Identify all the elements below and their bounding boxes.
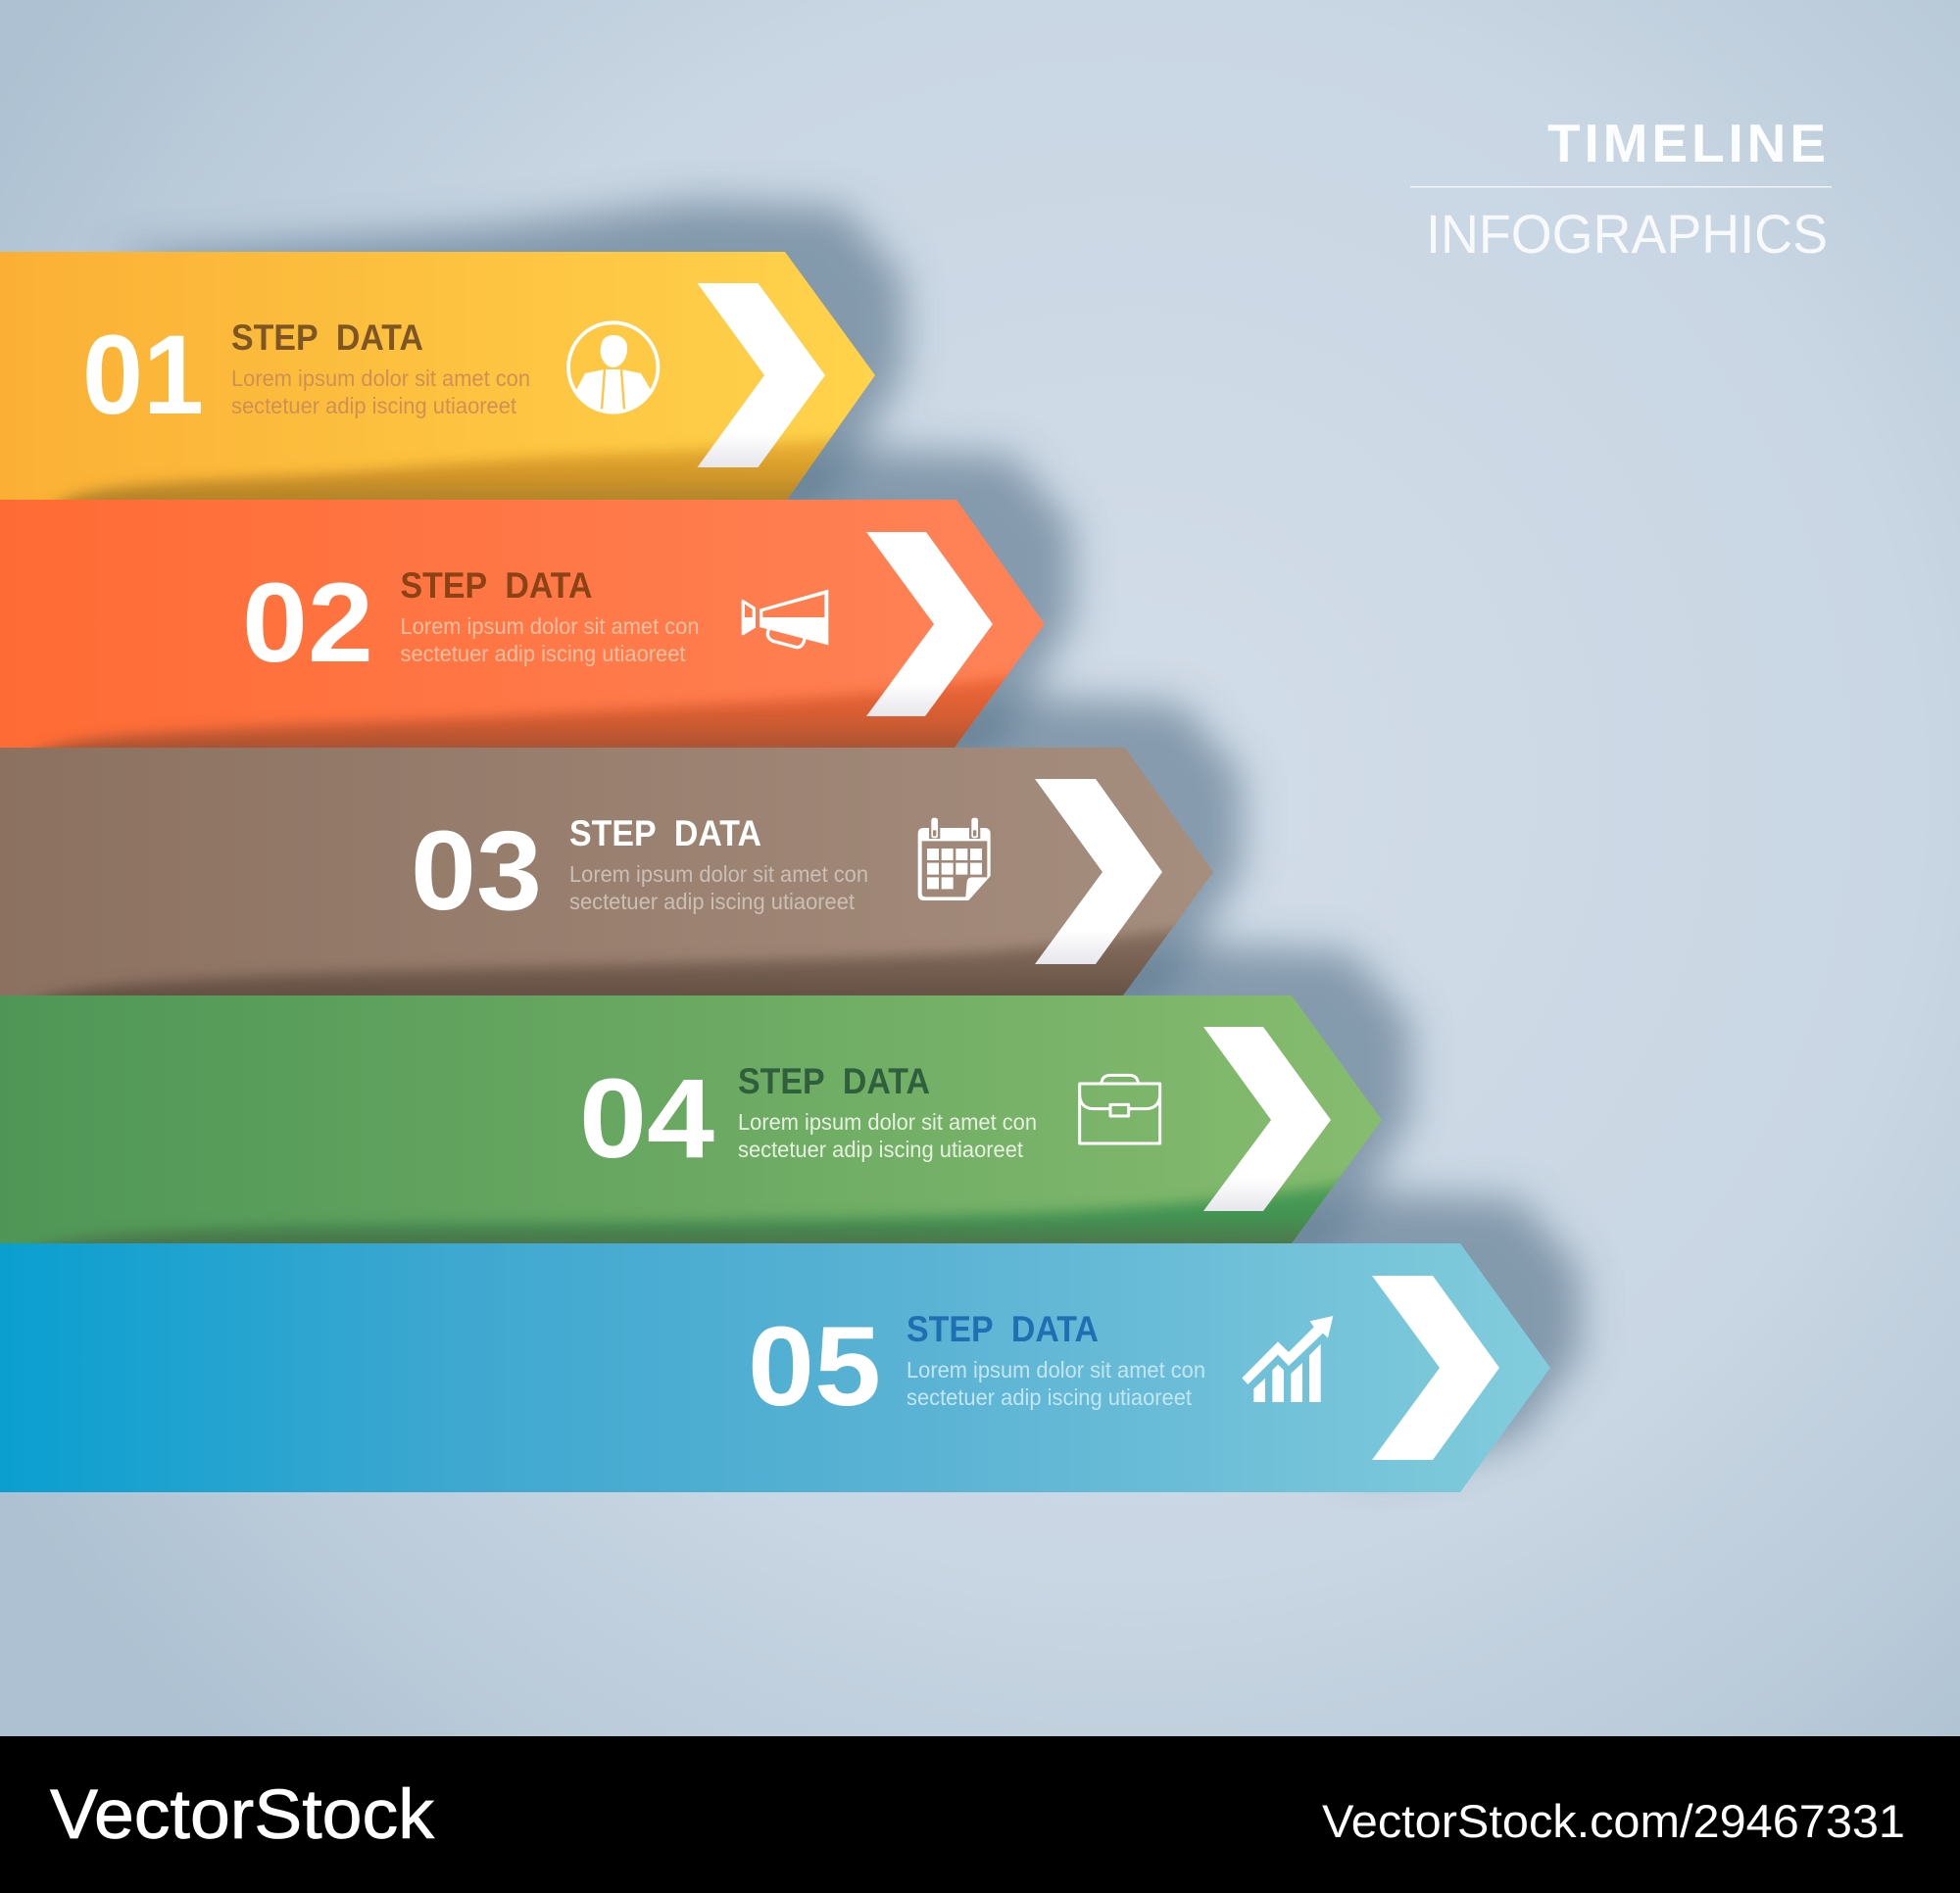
footer logo: VectorStock xyxy=(50,1776,435,1854)
title rule xyxy=(1410,186,1832,188)
body text 4 xyxy=(738,1109,1037,1162)
body text 4: Lorem ipsum dolor sit amet con xyxy=(738,1109,1037,1135)
body text 5 xyxy=(906,1357,1205,1410)
arrow shadows xyxy=(108,201,1580,1472)
arrow body 1 xyxy=(0,252,875,500)
heading 1: STEP DATA xyxy=(231,317,423,358)
body text 4: sectetuer adip iscing utiaoreet xyxy=(738,1137,1023,1162)
body text 5: sectetuer adip iscing utiaoreet xyxy=(906,1384,1192,1410)
body text 5: Lorem ipsum dolor sit amet con xyxy=(906,1357,1205,1383)
chevron 4 xyxy=(1203,1027,1331,1211)
body text 3: Lorem ipsum dolor sit amet con xyxy=(569,861,868,887)
step 5 arrow xyxy=(0,1243,1550,1492)
footer bar xyxy=(0,1736,1960,1893)
body text 3: sectetuer adip iscing utiaoreet xyxy=(569,889,855,914)
arrow body 2 xyxy=(0,500,1045,748)
body text 2: sectetuer adip iscing utiaoreet xyxy=(400,641,686,666)
heading 4: STEP DATA xyxy=(738,1061,930,1101)
step 3 arrow xyxy=(0,748,1254,1009)
heading 2: STEP DATA xyxy=(400,565,592,606)
body text 2: Lorem ipsum dolor sit amet con xyxy=(400,613,700,639)
icon: calendar xyxy=(918,818,991,900)
step 2 arrow xyxy=(0,500,1078,764)
step 4 arrow xyxy=(0,995,1411,1259)
heading 5: STEP DATA xyxy=(906,1309,1099,1349)
shadow band 4 xyxy=(38,1177,1340,1243)
title xyxy=(1410,113,1832,265)
step 1 arrow xyxy=(0,252,875,500)
icon: briefcase xyxy=(1080,1075,1160,1143)
body text 1: Lorem ipsum dolor sit amet con xyxy=(231,365,530,391)
chevron 3 xyxy=(1035,779,1162,964)
body text 1: sectetuer adip iscing utiaoreet xyxy=(231,393,516,418)
icon: growth chart xyxy=(1242,1316,1333,1402)
heading 3: STEP DATA xyxy=(569,813,761,853)
chevron 2 xyxy=(866,532,993,716)
shadow band 3 xyxy=(36,925,1174,995)
footer url: VectorStock.com/29467331 xyxy=(1322,1796,1905,1848)
shadow band 2 xyxy=(30,670,1010,748)
shadow band 1 xyxy=(50,433,834,500)
body text 1 xyxy=(231,365,530,418)
body text 2 xyxy=(400,613,700,666)
number 05: 05 xyxy=(748,1304,881,1430)
arrow body 5 xyxy=(0,1243,1550,1492)
arrow body 4 xyxy=(0,995,1382,1243)
chevron 5 xyxy=(1372,1276,1499,1460)
icon: businessman xyxy=(568,322,658,416)
number 01: 01 xyxy=(82,313,204,438)
number 04: 04 xyxy=(579,1056,714,1182)
icon: megaphone xyxy=(742,590,828,648)
chevron 1 xyxy=(698,283,825,467)
title line 1: TIMELINE xyxy=(1547,113,1826,173)
body text 3 xyxy=(569,861,868,914)
number 03: 03 xyxy=(411,808,542,934)
arrow body 3 xyxy=(0,748,1213,995)
number 02: 02 xyxy=(242,560,373,686)
title line 2: INFOGRAPHICS xyxy=(1426,203,1828,265)
